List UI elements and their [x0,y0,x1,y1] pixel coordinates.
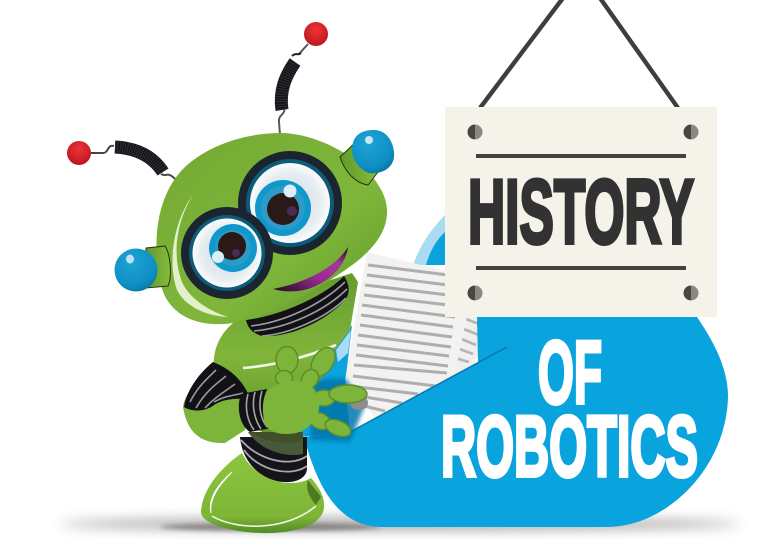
left ear [114,246,170,292]
front paper lines [350,265,455,411]
blue cloud back layer [300,215,445,437]
bottom screws [468,286,698,300]
heading: OF: OF [538,322,602,422]
sign ropes [480,0,678,108]
top screws [468,124,698,140]
right ear [340,130,394,185]
stacked papers [345,252,498,420]
left eye [181,207,273,299]
foot [201,453,324,533]
head highlight [172,195,228,317]
torso [214,273,358,443]
left antenna [67,141,182,185]
back paper lines [455,318,482,362]
hand [263,343,368,442]
right eye [238,151,342,255]
robot [67,22,394,533]
top antenna [279,22,328,135]
ground shadow [60,518,740,531]
front paper [345,252,475,420]
head [156,133,387,324]
mouth [273,247,348,291]
neck collar [246,276,349,336]
waist coil [240,432,307,482]
arm [183,362,272,443]
blue cloud front flap [304,316,728,527]
sign rules [476,154,686,270]
back paper [440,280,498,390]
sign board [445,107,717,317]
hanging sign [445,0,717,317]
